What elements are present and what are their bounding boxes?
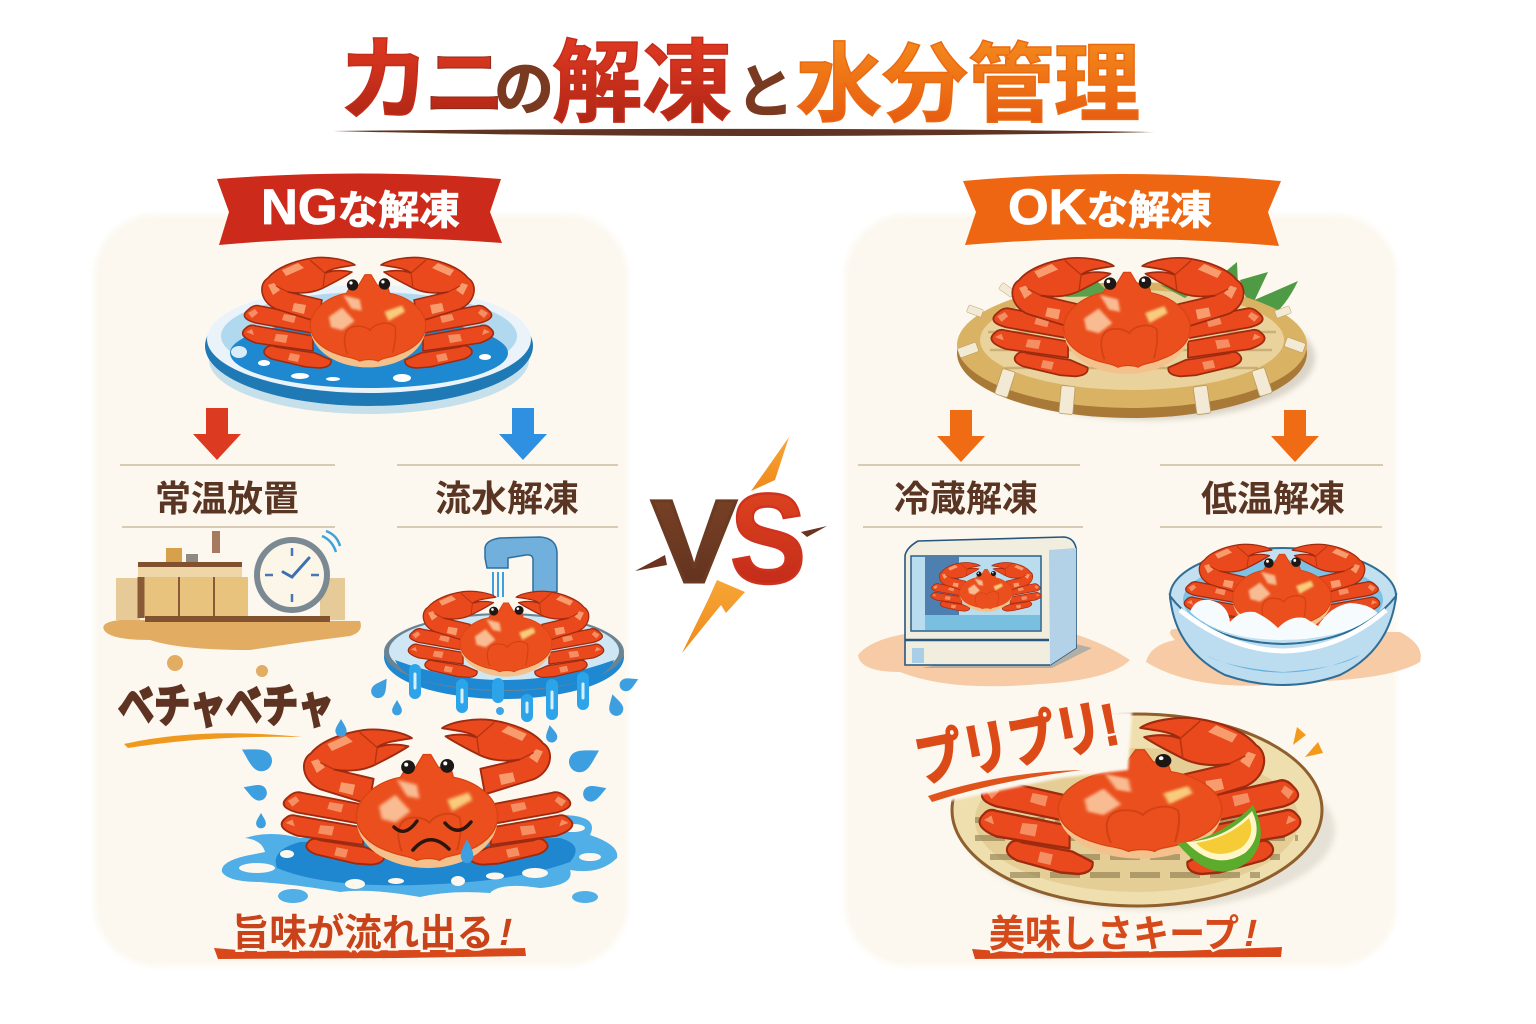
arrow: blue down: [499, 408, 547, 460]
icon: crab under running tap with dripping plate: [368, 537, 641, 717]
arrow: orange down left: [937, 410, 985, 462]
title: 水分管理: [796, 37, 1140, 133]
NG ribbon: [217, 174, 502, 245]
leaves: [1225, 262, 1298, 322]
label: low temperature: 低温解凍: [1201, 478, 1345, 519]
title: [338, 30, 1140, 134]
title: ニ: [424, 39, 506, 130]
title: と: [736, 60, 794, 125]
icon: kitchen counter and clock: [103, 531, 361, 677]
icon: crab on bamboo tray: [957, 258, 1315, 420]
swoosh under springy: [928, 770, 1082, 802]
divider lines right: [858, 465, 1383, 527]
text: soggy: ベチャベチャ: [118, 680, 334, 732]
icon: crab in ice water bowl: [1146, 544, 1421, 686]
divider lines left: [120, 465, 618, 527]
title: の: [494, 56, 554, 123]
OK ribbon: [963, 174, 1281, 246]
brush underline: [214, 948, 526, 959]
OK ribbon: OKな解凍: [1008, 179, 1212, 235]
text: springy: プリプリ!: [910, 692, 1124, 795]
swoosh under soggy: [124, 733, 302, 748]
title: 解凍: [552, 34, 732, 134]
panel: OK thawing: [845, 174, 1421, 966]
V letter: V: [651, 476, 737, 608]
VS emblem: [635, 437, 827, 653]
S letter: S: [730, 468, 806, 611]
spark shards: [635, 526, 827, 571]
arrow: orange down right: [1271, 410, 1319, 462]
title: カ: [338, 30, 430, 132]
lightning bottom: [682, 580, 745, 653]
label: refrigerator: 冷蔵解凍: [894, 478, 1038, 519]
sparks: [1293, 727, 1323, 757]
NG ribbon: NGな解凍: [261, 179, 460, 235]
label: room temperature: 常温放置: [155, 478, 299, 519]
panel: NG thawing: [94, 174, 641, 966]
icon: crab on tray with citrus: [952, 714, 1335, 910]
icon: crab in refrigerator: [858, 537, 1130, 686]
icon: crab on plate with water: [205, 257, 533, 414]
arrow: red down: [193, 408, 241, 460]
text: umami flows out: 旨味が流れ出る: [232, 913, 494, 955]
title underline: [333, 129, 1155, 136]
label: running water: 流水解凍: [435, 478, 579, 519]
brush underline: [972, 947, 1282, 959]
icon: sad crab in puddle: [222, 719, 617, 903]
lightning top: [751, 437, 789, 491]
cream patch behind springy text: [915, 712, 1132, 805]
text: keep delicious: !: [1240, 912, 1262, 955]
text: umami flows out: !: [495, 911, 517, 954]
text: keep delicious: 美味しさキープ: [989, 914, 1239, 956]
